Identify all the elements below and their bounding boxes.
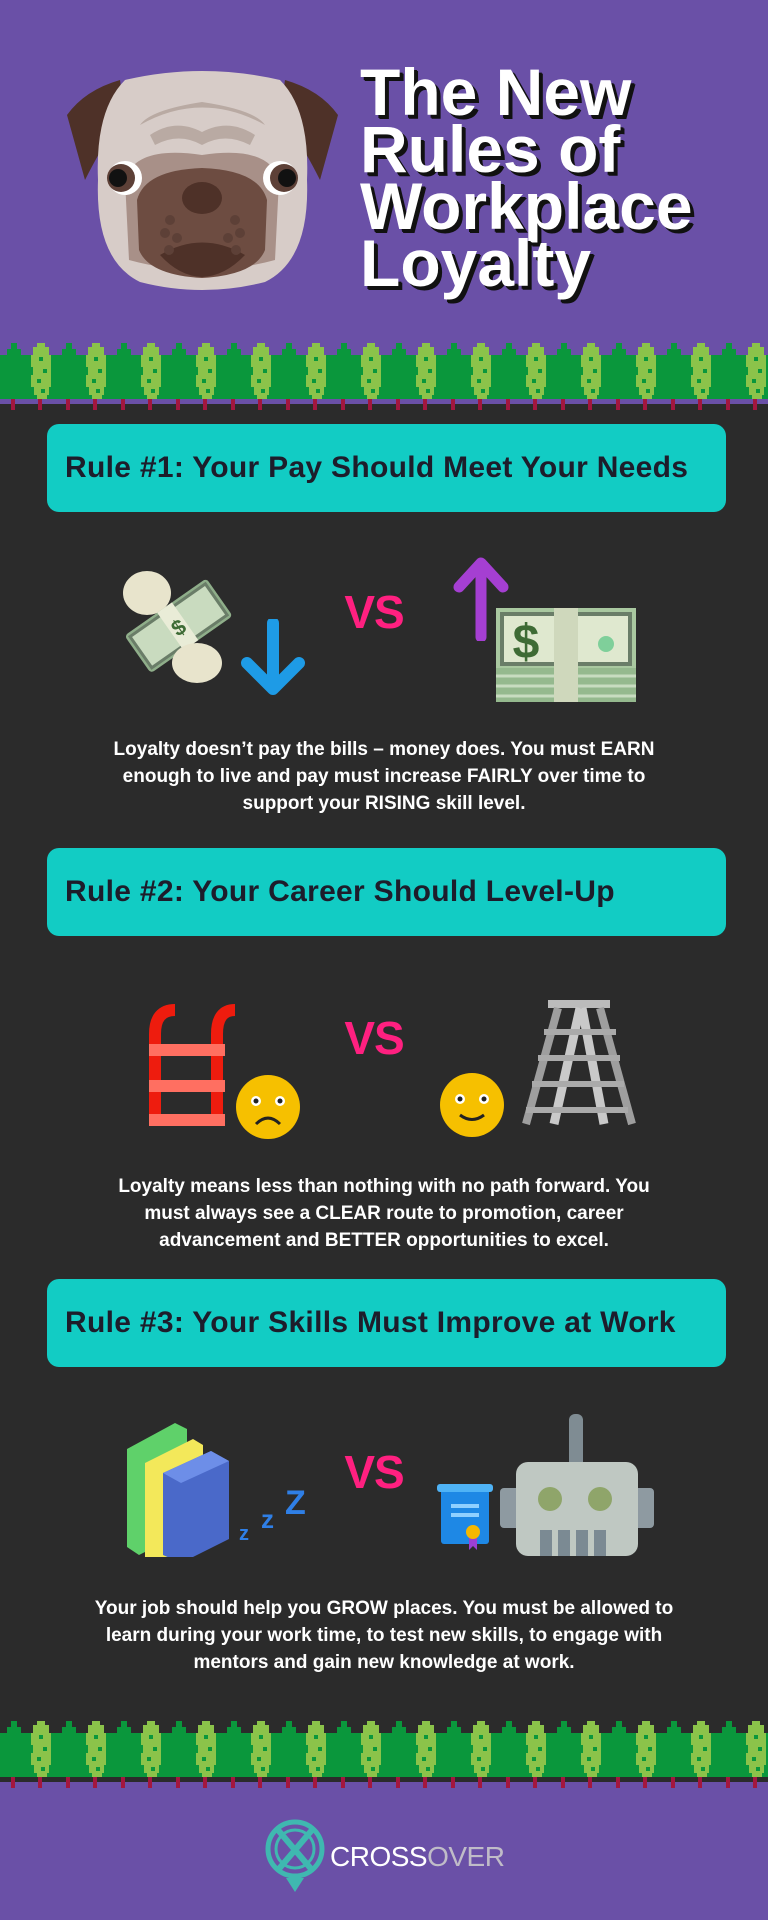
title: Workplace xyxy=(360,169,693,243)
footer logo: crossover: CROSSOVER xyxy=(330,1841,504,1872)
vs 1: VS xyxy=(344,586,404,638)
header background xyxy=(0,0,768,404)
icon: flying money: $ xyxy=(166,614,191,641)
decorative tree border top xyxy=(0,343,768,410)
paragraph rule 3: Your job should help you GROW places. You must be allowed to learn during your work time, to test new skills, to engage with mentors and gain new knowledge at work. xyxy=(95,1598,673,1673)
icon: sad face xyxy=(236,1075,300,1139)
title xyxy=(360,55,694,304)
icon: crossover pin xyxy=(266,1820,324,1892)
icon: money stack: $ xyxy=(513,616,540,669)
title: Loyalty xyxy=(360,226,591,300)
rule 2 heading: Rule #2: Your Career Should Level-Up xyxy=(65,875,615,908)
footer background xyxy=(0,1782,768,1920)
rule 3 heading: Rule #3: Your Skills Must Improve at Work xyxy=(65,1306,676,1339)
rule 3 heading xyxy=(47,1279,726,1367)
title: The New xyxy=(360,55,631,129)
icon: money stack xyxy=(496,608,636,702)
icon: flying money xyxy=(123,571,232,683)
decorative tree border bottom xyxy=(0,1721,768,1788)
icon: books xyxy=(127,1423,229,1557)
icon: zzz: Z xyxy=(285,1484,306,1522)
rule 1 heading xyxy=(47,424,726,512)
vs 3: VS xyxy=(344,1446,404,1498)
paragraph rule 2: Loyalty means less than nothing with no path forward. You must always see a CLEAR route to promotion, career advancement and BETTER opportunities to excel. xyxy=(118,1176,650,1251)
paragraph rule 1: Loyalty doesn’t pay the bills – money does. You must EARN enough to live and pay must increase FAIRLY over time to support your RISING skill level. xyxy=(114,739,654,814)
rule 2 heading xyxy=(47,848,726,936)
icon: purple up arrow xyxy=(454,558,508,641)
icon: step ladder xyxy=(522,1000,636,1126)
icon: zzz xyxy=(239,1484,306,1544)
rule 1 heading: Rule #1: Your Pay Should Meet Your Needs xyxy=(65,451,688,484)
icon: robot xyxy=(500,1414,654,1556)
title: Rules of xyxy=(360,112,620,186)
footer logo: crossover xyxy=(266,1820,504,1892)
icon: zzz: z xyxy=(261,1504,274,1534)
icon: certificate xyxy=(437,1484,493,1550)
icon: red ladder xyxy=(149,1004,235,1126)
vs 2: VS xyxy=(344,1012,404,1064)
icon: smiley face xyxy=(440,1073,504,1137)
icon: blue down arrow xyxy=(241,619,305,695)
icon: pug face xyxy=(67,71,338,290)
